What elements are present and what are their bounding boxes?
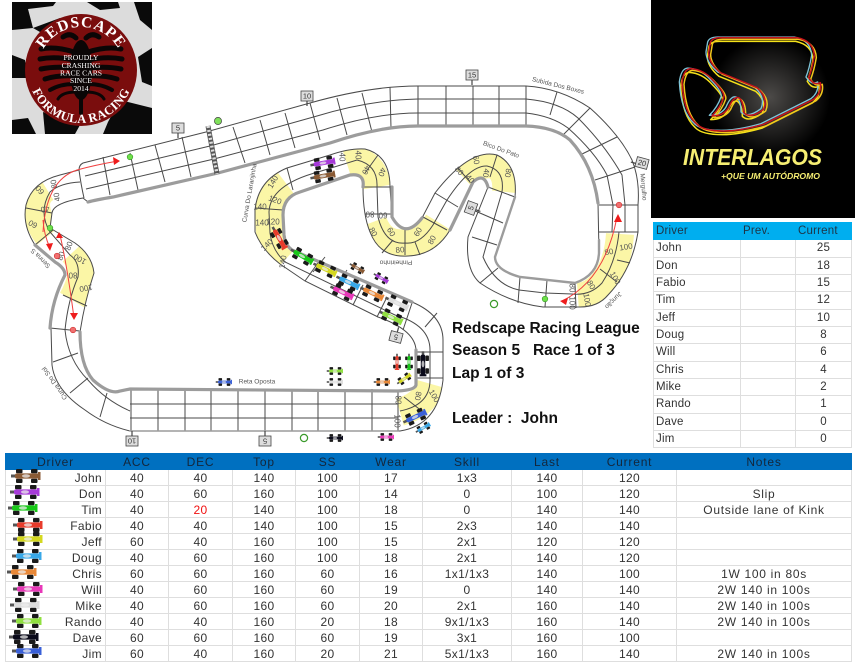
driver stats table: 1x3 xyxy=(457,470,477,484)
driver stats table: Fabio xyxy=(70,518,102,532)
corner names: Junção xyxy=(603,290,623,310)
track map and logos xyxy=(12,0,855,446)
corner names: Curva Do Sol xyxy=(41,365,69,401)
driver stats table: 100 xyxy=(619,630,640,644)
logo: Redscape Formula Racing: FORMULA RACING xyxy=(32,87,129,123)
driver stats table: 160 xyxy=(253,630,275,644)
speed limit labels: 60 xyxy=(33,183,46,196)
driver stats table: 60 xyxy=(193,598,208,612)
driver stats table: 60 xyxy=(130,534,144,548)
driver stats table: Chris xyxy=(72,566,102,580)
driver stats table: Will xyxy=(81,582,102,596)
speed limit labels: 100 xyxy=(568,296,576,310)
driver stats table: 140 xyxy=(619,598,640,612)
driver stats table: Rando xyxy=(65,614,102,628)
driver stats table: 60 xyxy=(193,582,208,596)
race title block xyxy=(452,320,640,427)
driver stats table: 140 xyxy=(253,518,275,532)
driver stats table: 40 xyxy=(130,614,144,628)
cars on the track xyxy=(267,155,429,428)
driver stats table: Current xyxy=(607,454,652,468)
speed limit labels: 60 xyxy=(26,218,39,230)
driver stats table: 14 xyxy=(384,486,398,500)
driver stats table: 60 xyxy=(130,646,144,660)
speed limit labels: 80 xyxy=(568,284,576,293)
driver stats table: 17 xyxy=(384,470,398,484)
corner names: Senna S xyxy=(29,246,52,269)
speed limit labels: 120 xyxy=(267,193,283,207)
driver stats table: 40 xyxy=(193,534,208,548)
driver stats table: ACC xyxy=(123,454,151,468)
driver stats table: 100 xyxy=(317,550,338,564)
standings table: 4 xyxy=(820,364,827,376)
speed limit labels: 80 xyxy=(503,168,513,179)
standings table: 15 xyxy=(817,277,830,289)
speed limit labels: 100 xyxy=(78,282,93,294)
speed limit labels: 40 xyxy=(52,191,62,202)
speed limit labels: 100 xyxy=(608,270,623,287)
standings table: 6 xyxy=(820,346,827,358)
standings table: Dave xyxy=(656,416,684,428)
driver stats table: 140 xyxy=(619,614,640,628)
standings table: John xyxy=(656,242,682,254)
driver stats table: 2x3 xyxy=(457,518,477,532)
speed limit labels: 60 xyxy=(385,226,397,239)
driver stats table: 2W 140 in 100s xyxy=(717,582,811,596)
driver stats table: 120 xyxy=(619,486,640,500)
driver stats table: 140 xyxy=(536,502,558,516)
driver stats table: 40 xyxy=(193,518,208,532)
standings table: Prev. xyxy=(743,225,770,237)
driver stats table: 140 xyxy=(619,582,640,596)
driver stats table: Top xyxy=(253,454,275,468)
race title block: Lap 1 of 3 xyxy=(452,365,524,382)
driver stats table: 2x1 xyxy=(457,598,477,612)
driver stats table: DEC xyxy=(187,454,214,468)
speed limit labels: 100 xyxy=(581,293,593,308)
driver stats table: 160 xyxy=(536,630,558,644)
speed limit labels: 40 xyxy=(376,166,388,178)
standings table: 0 xyxy=(820,433,827,445)
corner names: Mergulho xyxy=(638,173,648,201)
driver stats table: 60 xyxy=(320,566,335,580)
driver stats table: 40 xyxy=(193,646,208,660)
driver stats table xyxy=(5,453,852,662)
distance markers: 20 xyxy=(637,158,647,168)
speed limit labels: 40 xyxy=(338,153,346,162)
Interlagos tagline: +QUE UM AUTÓDROMO xyxy=(721,170,820,181)
cell dividers xyxy=(103,86,638,232)
logo centre text: SINCE xyxy=(70,76,92,85)
driver stats table: 100 xyxy=(317,534,338,548)
driver stats table: 1x1/1x3 xyxy=(445,566,489,580)
movement arrows xyxy=(43,157,622,320)
standings table: 1 xyxy=(820,398,827,410)
driver stats table: 160 xyxy=(536,614,558,628)
driver stats table: 40 xyxy=(130,502,144,516)
race title block: Season 5 Race 1 of 3 xyxy=(452,342,615,359)
driver stats table: 9x1/1x3 xyxy=(445,614,489,628)
driver stats table: Don xyxy=(79,486,102,500)
driver stats table: Driver xyxy=(37,454,74,468)
track edges and lane lines xyxy=(25,86,638,431)
driver stats table: 2x1 xyxy=(457,534,477,548)
speed limit labels: 80 xyxy=(49,178,59,189)
driver stats table: 2W 140 in 100s xyxy=(717,646,811,660)
driver stats table: 120 xyxy=(536,534,558,548)
driver stats table: 140 xyxy=(619,502,640,516)
speed limit labels: 80 xyxy=(426,233,438,246)
driver stats table: 60 xyxy=(130,566,144,580)
driver stats table: Dave xyxy=(73,630,102,644)
standings table: Rando xyxy=(656,398,691,410)
speed limit labels: 40 xyxy=(360,164,372,177)
standings table: Driver xyxy=(656,225,688,237)
driver stats table: 21 xyxy=(384,646,398,660)
standings table: Jim xyxy=(656,433,674,445)
yellow corner speed zones xyxy=(36,162,620,412)
logo centre text: PROUDLY xyxy=(63,53,99,62)
driver stats table: Jeff xyxy=(81,534,102,548)
driver stats table: 18 xyxy=(384,614,398,628)
corner names xyxy=(29,76,648,401)
logo centre text: RACE CARS xyxy=(60,68,102,78)
standings table: 10 xyxy=(817,312,830,324)
driver stats table: 100 xyxy=(317,470,338,484)
speed limit labels: 80 xyxy=(394,396,402,405)
driver stats table: Last xyxy=(534,454,560,468)
race title block: Redscape Racing League xyxy=(452,320,640,337)
logo eagle xyxy=(40,35,122,113)
driver stats table: 2W 140 in 100s xyxy=(717,598,811,612)
driver stats table: 120 xyxy=(619,550,640,564)
distance markers: 15 xyxy=(468,70,476,80)
driver stats table: 100 xyxy=(536,486,558,500)
driver stats table: 100 xyxy=(317,502,338,516)
driver stats table: 140 xyxy=(536,518,558,532)
logo centre text: 2014 xyxy=(73,84,89,93)
driver stats table: 160 xyxy=(253,550,275,564)
driver stats table: 60 xyxy=(130,630,144,644)
driver stats table: 20 xyxy=(384,598,398,612)
speed limit labels: 40 xyxy=(39,204,50,214)
speed limit labels: 80 xyxy=(395,245,405,255)
driver stats table: 60 xyxy=(193,486,208,500)
speed limit labels: 100 xyxy=(427,388,442,405)
driver stats table: 40 xyxy=(130,518,144,532)
speed limit labels: 80 xyxy=(367,226,379,239)
driver stats table: 140 xyxy=(536,470,558,484)
driver stats table: 60 xyxy=(193,566,208,580)
driver stats table: 100 xyxy=(317,486,338,500)
standings table: 25 xyxy=(817,242,830,254)
corner names: Pinheirinho xyxy=(379,258,412,266)
driver stats table: Mike xyxy=(75,598,102,612)
corner names: Subida Dos Boxes xyxy=(531,76,586,96)
grey wall lines xyxy=(35,126,599,431)
standings table: 0 xyxy=(820,416,827,428)
driver stats table: 140 xyxy=(253,502,275,516)
driver stats table: 100 xyxy=(619,566,640,580)
speed limit labels: 80 xyxy=(365,210,374,218)
driver stats table: 15 xyxy=(384,518,398,532)
distance markers xyxy=(126,70,649,446)
speed limit labels: 120 xyxy=(266,218,280,226)
speed limit labels: 140 xyxy=(253,202,267,212)
driver stats table: 0 xyxy=(463,502,471,516)
speed limit labels: 40 xyxy=(464,173,477,186)
driver stats table: 60 xyxy=(193,550,208,564)
driver stats table: 0 xyxy=(463,486,471,500)
driver stats table: 140 xyxy=(536,582,558,596)
logo: Interlagos xyxy=(651,0,855,218)
race title block: Leader : John xyxy=(452,410,558,427)
speed limit labels xyxy=(26,151,634,428)
driver stats table: 160 xyxy=(253,598,275,612)
start finish line xyxy=(208,126,217,174)
driver stats table: 160 xyxy=(253,646,275,660)
driver stats table: 140 xyxy=(253,470,275,484)
distance markers: 5 xyxy=(393,332,399,342)
distance markers: 10 xyxy=(303,92,311,100)
standings table: Don xyxy=(656,260,678,272)
speed limit labels: 40 xyxy=(354,151,362,160)
ghost cars beside the track xyxy=(216,261,432,442)
speed limit labels: 100 xyxy=(619,241,634,253)
driver stats table: 19 xyxy=(384,582,398,596)
speed limit labels: 80 xyxy=(63,240,75,252)
driver stats table: SS xyxy=(319,454,336,468)
driver stats table: Wear xyxy=(375,454,407,468)
driver stats table: 160 xyxy=(536,598,558,612)
driver stats table: 60 xyxy=(320,598,335,612)
speed limit labels: 100 xyxy=(71,251,88,266)
distance markers: 5 xyxy=(466,205,476,211)
standings table: Doug xyxy=(656,329,684,341)
Interlagos wordmark: INTERLAGOS xyxy=(683,144,823,170)
distance markers: 10 xyxy=(128,436,136,446)
standings table: Current xyxy=(798,225,838,237)
driver stats table: 40 xyxy=(130,582,144,596)
driver stats table: 20 xyxy=(320,646,335,660)
standings table: Mike xyxy=(656,381,681,393)
driver stats table: 40 xyxy=(130,598,144,612)
speed limit labels: 60 xyxy=(378,210,387,220)
standings table: 12 xyxy=(817,294,830,306)
driver stats table: 40 xyxy=(130,470,144,484)
driver stats table: 160 xyxy=(253,486,275,500)
driver stats table: 19 xyxy=(384,630,398,644)
driver stats table: 60 xyxy=(320,630,335,644)
driver stats table: Notes xyxy=(746,454,782,468)
driver stats table: 100 xyxy=(317,518,338,532)
logo checkered flag xyxy=(12,2,152,134)
speed limit labels: 80 xyxy=(585,279,597,292)
driver stats table: Jim xyxy=(82,646,102,660)
speed limit labels: 80 xyxy=(68,270,77,280)
driver stats table: Slip xyxy=(753,486,775,500)
driver stats table: 140 xyxy=(619,518,640,532)
driver stats table: 120 xyxy=(619,534,640,548)
driver stats table: 1W 100 in 80s xyxy=(721,566,807,580)
speed limit labels: 140 xyxy=(266,173,281,190)
driver stats table: Tim xyxy=(81,502,102,516)
speed limit labels: 40 xyxy=(481,168,491,179)
standings table: Fabio xyxy=(656,277,686,289)
driver stats table: 160 xyxy=(253,582,275,596)
speed limit labels: 100 xyxy=(392,414,402,428)
driver stats table: 140 xyxy=(619,646,640,660)
speed limit labels: 80 xyxy=(453,165,466,178)
driver stats table: 40 xyxy=(193,470,208,484)
speed limit labels: 80 xyxy=(55,250,67,262)
race track map xyxy=(25,86,638,431)
driver stats table: 15 xyxy=(384,534,398,548)
driver stats table: 160 xyxy=(253,614,275,628)
timer icons xyxy=(214,117,498,442)
standings table: 8 xyxy=(820,329,827,341)
standings table: 18 xyxy=(817,260,830,272)
driver stats table: Outside lane of Kink xyxy=(703,502,825,516)
standings table: 2 xyxy=(820,381,827,393)
driver stats table: 16 xyxy=(384,566,398,580)
logo centre text: CRASHING xyxy=(62,61,101,70)
driver stats table: 18 xyxy=(384,550,398,564)
driver stats table: Skill xyxy=(454,454,480,468)
corner names: Bico Do Pato xyxy=(482,140,520,160)
driver stats table: 40 xyxy=(130,550,144,564)
logo arc text: REDSCAPE xyxy=(35,17,126,49)
logo badge xyxy=(25,14,137,126)
driver stats table: 2W 140 in 100s xyxy=(717,614,811,628)
driver stats table: 18 xyxy=(384,502,398,516)
driver stats table: 120 xyxy=(619,470,640,484)
driver stats table: 160 xyxy=(536,646,558,660)
driver stats table: 5x1/1x3 xyxy=(445,646,489,660)
distance markers: 5 xyxy=(263,436,267,446)
speed limit labels: 80 xyxy=(604,247,615,257)
logo: Redscape Formula Racing xyxy=(12,2,152,134)
driver stats table: John xyxy=(75,470,102,484)
driver stats table: 160 xyxy=(253,566,275,580)
driver stats table: 140 xyxy=(536,566,558,580)
position dots xyxy=(47,154,622,333)
driver stats table: 60 xyxy=(320,582,335,596)
speed limit labels: 140 xyxy=(277,254,289,269)
corner names: Reta Oposta xyxy=(239,378,276,386)
driver stats table: 60 xyxy=(193,630,208,644)
driver stats table: 20 xyxy=(193,502,208,516)
standings table: Jeff xyxy=(656,312,675,324)
standings table: Will xyxy=(656,346,675,358)
driver stats table: 140 xyxy=(536,550,558,564)
driver stats table: 3x1 xyxy=(457,630,477,644)
driver stats table: 2x1 xyxy=(457,550,477,564)
corner names: Curva Do Laranjinha xyxy=(241,163,259,223)
speed limit labels: 140 xyxy=(259,237,275,253)
speed limit labels: 60 xyxy=(412,225,424,238)
speed limit labels: 60 xyxy=(471,155,481,166)
driver stats table: 40 xyxy=(130,486,144,500)
driver stats table: Doug xyxy=(72,550,102,564)
driver stats table: 40 xyxy=(193,614,208,628)
speed limit labels: 80 xyxy=(413,391,423,402)
standings table: Tim xyxy=(656,294,675,306)
distance markers: 5 xyxy=(176,124,180,132)
logo centre text xyxy=(60,55,102,91)
speed limit labels: 140 xyxy=(255,218,269,228)
driver stats table: 20 xyxy=(320,614,335,628)
driver stats table: 0 xyxy=(463,582,471,596)
standings table: Chris xyxy=(656,364,684,376)
standings table xyxy=(653,222,852,448)
driver stats table: 160 xyxy=(253,534,275,548)
